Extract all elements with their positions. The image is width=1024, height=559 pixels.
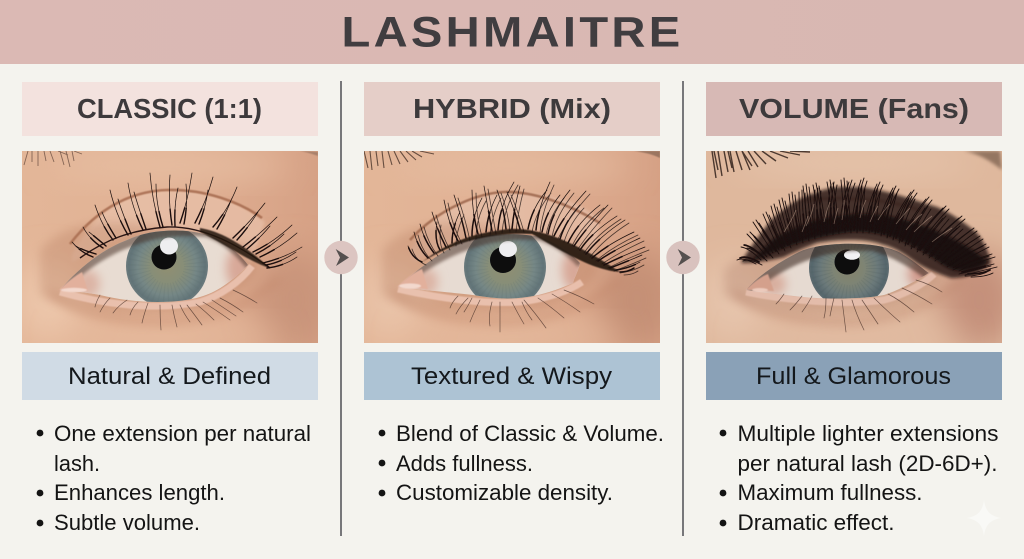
hybrid bullet list: [379, 421, 664, 505]
volume heading: VOLUME (Fans): [739, 93, 969, 124]
panel: classic: [15, 82, 335, 535]
hybrid bullet list: Adds fullness.: [396, 451, 533, 476]
volume eye photo: [706, 151, 1002, 343]
volume bullet list: [720, 421, 998, 535]
volume bullet list: Dramatic effect.: [738, 510, 894, 535]
classic bullet list: One extension per natural: [54, 421, 311, 446]
panel: hybrid: [357, 82, 677, 505]
arrow: classic to hybrid: [324, 241, 358, 274]
icon: sparkle: [967, 500, 1001, 536]
volume caption: [706, 352, 1002, 400]
arrow: hybrid to volume: [666, 241, 700, 274]
volume bullet list: per natural lash (2D-6D+).: [738, 451, 998, 476]
hybrid bullet list: Blend of Classic & Volume.: [396, 421, 664, 446]
classic heading: [22, 82, 318, 136]
volume caption: Full & Glamorous: [756, 363, 951, 390]
volume heading: [706, 82, 1002, 136]
hybrid eye photo: [364, 151, 660, 343]
classic bullet list: Enhances length.: [54, 480, 225, 505]
hybrid heading: HYBRID (Mix): [413, 93, 611, 124]
hybrid bullet list: Customizable density.: [396, 480, 613, 505]
hybrid caption: [364, 352, 660, 400]
hybrid heading: [364, 82, 660, 136]
classic caption: Natural & Defined: [68, 363, 271, 390]
hybrid caption: Textured & Wispy: [411, 363, 612, 390]
title: LASHMAITRE: [342, 9, 684, 57]
volume bullet list: Multiple lighter extensions: [738, 421, 998, 446]
classic bullet list: lash.: [54, 451, 100, 476]
classic bullet list: [37, 421, 311, 535]
title banner: [0, 0, 1024, 64]
classic caption: [22, 352, 318, 400]
classic bullet list: Subtle volume.: [54, 510, 200, 535]
classic heading: CLASSIC (1:1): [77, 93, 262, 124]
classic eye photo: [22, 151, 318, 343]
panel: volume: [699, 82, 1019, 535]
volume bullet list: Maximum fullness.: [738, 480, 922, 505]
